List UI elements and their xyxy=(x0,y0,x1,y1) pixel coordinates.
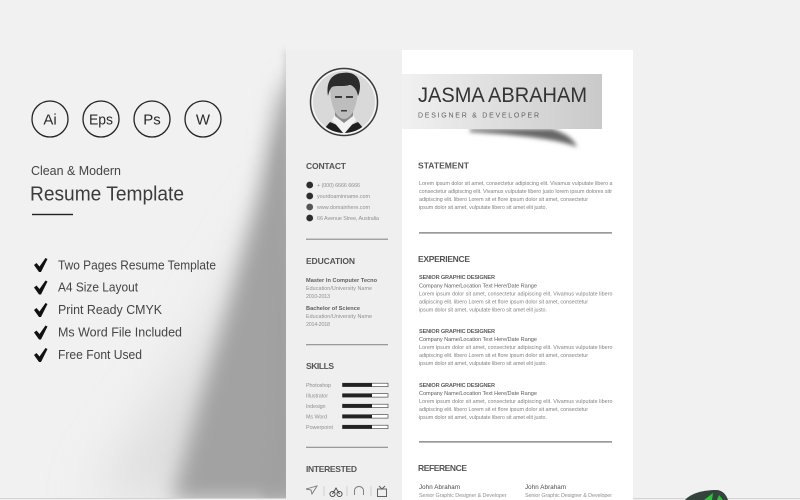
software badges: Eps xyxy=(89,112,113,128)
statement section: consectetur adipiscing elit. Vivamus vulputate libero justo lorem ipsum dolores sitr xyxy=(419,189,612,195)
contact list xyxy=(306,182,379,222)
job 3: adipiscing elit. libero Lorem sit et flore ipsum dolor sit amet, consectetur xyxy=(419,407,588,413)
job 1 xyxy=(419,275,612,314)
job 1: Lorem ipsum dolor sit amet, consectetur adipiscing elit. Vivamus vulputate libero xyxy=(419,292,612,298)
job 2: ipsum dolor sit amet, vulputate libero sit amet elit justo. xyxy=(419,361,547,367)
job 2: adipiscing elit. libero Lorem sit et flore ipsum dolor sit amet, consectetur xyxy=(419,353,588,359)
software badges: Ps xyxy=(143,112,161,128)
experience section: EXPERIENCE xyxy=(418,254,470,264)
job 2: SENIOR GRAPHIC DESIGNER xyxy=(419,329,495,335)
skills bars: Ms Word xyxy=(306,414,327,420)
feature checklist: Ms Word File Included xyxy=(58,324,182,340)
feature checklist xyxy=(34,258,216,362)
statement section: Lorem ipsum dolor sit amet, consectetur adipiscing elit. Vivamus vulputate libero a xyxy=(419,181,612,187)
interest icons xyxy=(306,486,386,497)
name banner: DESIGNER & DEVELOPER xyxy=(418,112,539,120)
reference section: John Abraham xyxy=(525,484,566,491)
contact list: www.domainhere.com xyxy=(316,205,370,211)
contact list: 66 Avenue Stree, Australia xyxy=(317,216,379,222)
floor line xyxy=(0,498,800,499)
software badges: Ai xyxy=(43,112,57,128)
page cast shadow xyxy=(112,50,286,498)
reference section xyxy=(418,463,612,499)
feature checklist: Print Ready CMYK xyxy=(58,302,162,317)
feature checklist: Two Pages Resume Template xyxy=(58,258,216,272)
experience section xyxy=(418,254,612,421)
resume page xyxy=(286,50,633,500)
education list: Bachelor of Science xyxy=(306,306,360,312)
heading: interested: INTERESTED xyxy=(306,464,357,474)
skills bars: Photoshop xyxy=(306,383,331,389)
job 1: ipsum dolor sit amet, vulputate libero sit amet elit justo. xyxy=(419,308,547,314)
statement section: STATEMENT xyxy=(418,161,470,171)
job 2 xyxy=(419,329,612,367)
reference section: Senior Graphic Designer & Developer xyxy=(419,493,507,499)
heading: skills: SKILLS xyxy=(306,361,334,371)
job 2: Lorem ipsum dolor sit amet, consectetur adipiscing elit. Vivamus vulputate libero xyxy=(419,345,612,351)
job 2: Company Name/Location Text Here/Date Range xyxy=(419,337,537,343)
title: Clean & Modern xyxy=(31,163,121,178)
education list: 2014-2018 xyxy=(306,322,330,328)
skills bars xyxy=(306,383,388,431)
reference section: John Abraham xyxy=(419,484,460,491)
job 1: adipiscing elit. libero Lorem sit et flore ipsum dolor sit amet, consectetur xyxy=(419,300,588,306)
job 1: Company Name/Location Text Here/Date Range xyxy=(419,284,537,290)
reference section: REFERENCE xyxy=(418,463,467,473)
name banner: JASMA ABRAHAM xyxy=(418,84,587,107)
skills bars: Powerpoint xyxy=(306,425,334,431)
skills bars: Indesign xyxy=(306,404,326,410)
software badges xyxy=(32,101,221,137)
reference section: Senior Graphic Designer & Developer xyxy=(525,493,612,499)
education list: Education/University Name xyxy=(306,286,372,292)
statement section xyxy=(418,161,612,211)
statement section: ipsum dolor sit amet, vulputate libero sit amet elit justo. xyxy=(419,205,547,211)
main panel xyxy=(402,50,633,500)
education list: Master In Computer Tecno xyxy=(306,278,378,284)
job 3: SENIOR GRAPHIC DESIGNER xyxy=(419,383,495,389)
job 3 xyxy=(419,383,612,421)
job 3: ipsum dolor sit amet, vulputate libero sit amet elit justo. xyxy=(419,415,547,421)
plant leaf xyxy=(685,490,728,500)
profile photo xyxy=(310,68,378,136)
software badges: W xyxy=(196,112,211,128)
title: Resume Template xyxy=(30,182,184,206)
statement section: adipiscing elit. libero Lorem sit et flore ipsum dolor sit amet, consectetur xyxy=(419,197,588,203)
name banner xyxy=(402,74,602,129)
contact list: + (000) 6666 6666 xyxy=(317,183,360,189)
job 3: Company Name/Location Text Here/Date Range xyxy=(419,391,537,397)
job 3: Lorem ipsum dolor sit amet, consectetur adipiscing elit. Vivamus vulputate libero xyxy=(419,399,612,405)
name banner shadow xyxy=(470,129,577,147)
feature checklist: A4 Size Layout xyxy=(58,280,138,294)
job 1: SENIOR GRAPHIC DESIGNER xyxy=(419,275,495,281)
skills bars: Illustrator xyxy=(306,394,328,400)
contact list: yourdoaminname.com xyxy=(317,194,370,200)
icon: check marks xyxy=(34,258,48,362)
sidebar panel xyxy=(286,50,402,500)
heading: contact: CONTACT xyxy=(306,161,347,171)
feature checklist: Free Font Used xyxy=(58,347,142,362)
heading: education: EDUCATION xyxy=(306,256,355,266)
title xyxy=(30,163,184,215)
education list xyxy=(306,278,378,328)
education list: Education/University Name xyxy=(306,314,372,320)
education list: 2010-2013 xyxy=(306,294,330,300)
